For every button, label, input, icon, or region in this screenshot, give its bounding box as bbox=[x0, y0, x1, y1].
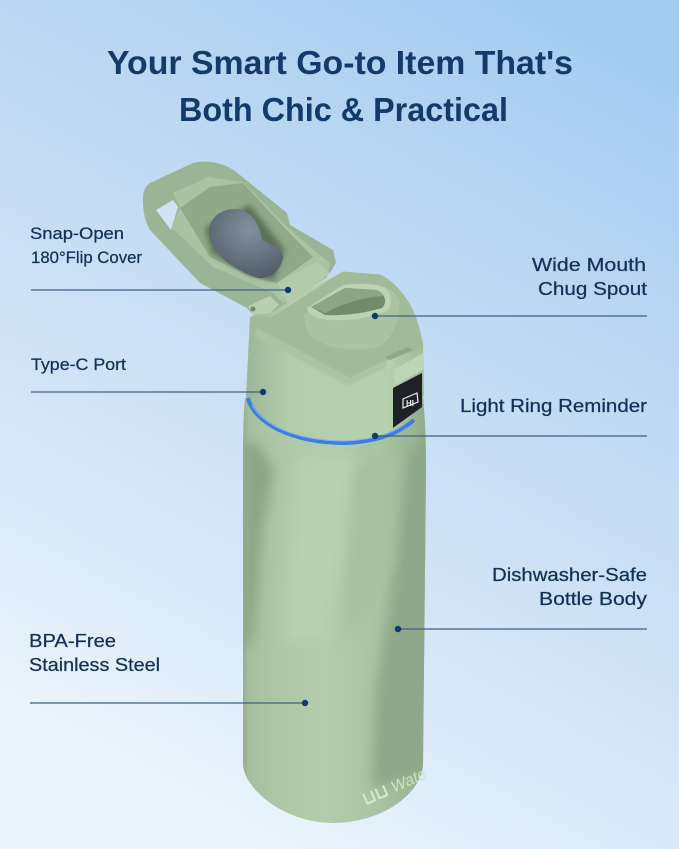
neck bbox=[246, 272, 424, 441]
callout: Type-C Port: Type-C Port bbox=[31, 355, 126, 374]
display: HI bbox=[406, 399, 414, 408]
callout: Snap-Open bbox=[30, 224, 291, 293]
logo: ⊔⊔ bbox=[359, 781, 391, 809]
spout bbox=[304, 283, 400, 350]
callout: Wide Mouth: Chug Spout bbox=[538, 278, 647, 299]
flip cover bbox=[143, 162, 336, 315]
title bbox=[107, 44, 573, 128]
callout: BPA-Free bbox=[29, 630, 308, 706]
charging port tab bbox=[385, 347, 413, 360]
callout: BPA-Free: BPA-Free bbox=[29, 630, 116, 651]
callout: Type-C Port bbox=[31, 355, 266, 395]
title: Your Smart Go-to Item That's bbox=[107, 44, 573, 81]
bottle body bbox=[240, 395, 430, 825]
callout: Snap-Open: 180°Flip Cover bbox=[31, 248, 142, 267]
callout: Light Ring bbox=[372, 395, 647, 439]
callout: Dishwasher-Safe: Bottle Body bbox=[539, 588, 648, 609]
callout: Dishwasher-Safe bbox=[395, 564, 648, 632]
bottle bbox=[143, 162, 430, 825]
neck shoulder bbox=[250, 272, 423, 378]
callout: Dishwasher-Safe: Dishwasher-Safe bbox=[492, 564, 647, 585]
title: Both Chic & Practical bbox=[179, 91, 508, 128]
callout: Snap-Open: Snap-Open bbox=[30, 224, 124, 243]
button bbox=[393, 353, 423, 385]
logo bbox=[359, 764, 429, 809]
logo: Wate bbox=[389, 766, 429, 796]
light ring bbox=[248, 398, 414, 443]
callout: Wide Mouth: Wide Mouth bbox=[532, 254, 646, 275]
callout: BPA-Free: Stainless Steel bbox=[29, 654, 160, 675]
display bbox=[393, 373, 422, 428]
callout: Light Ring: Light Ring Reminder bbox=[460, 395, 647, 416]
silicone plug bbox=[209, 209, 283, 278]
hinge bbox=[277, 262, 330, 303]
callout: Wide Mouth bbox=[372, 254, 647, 319]
